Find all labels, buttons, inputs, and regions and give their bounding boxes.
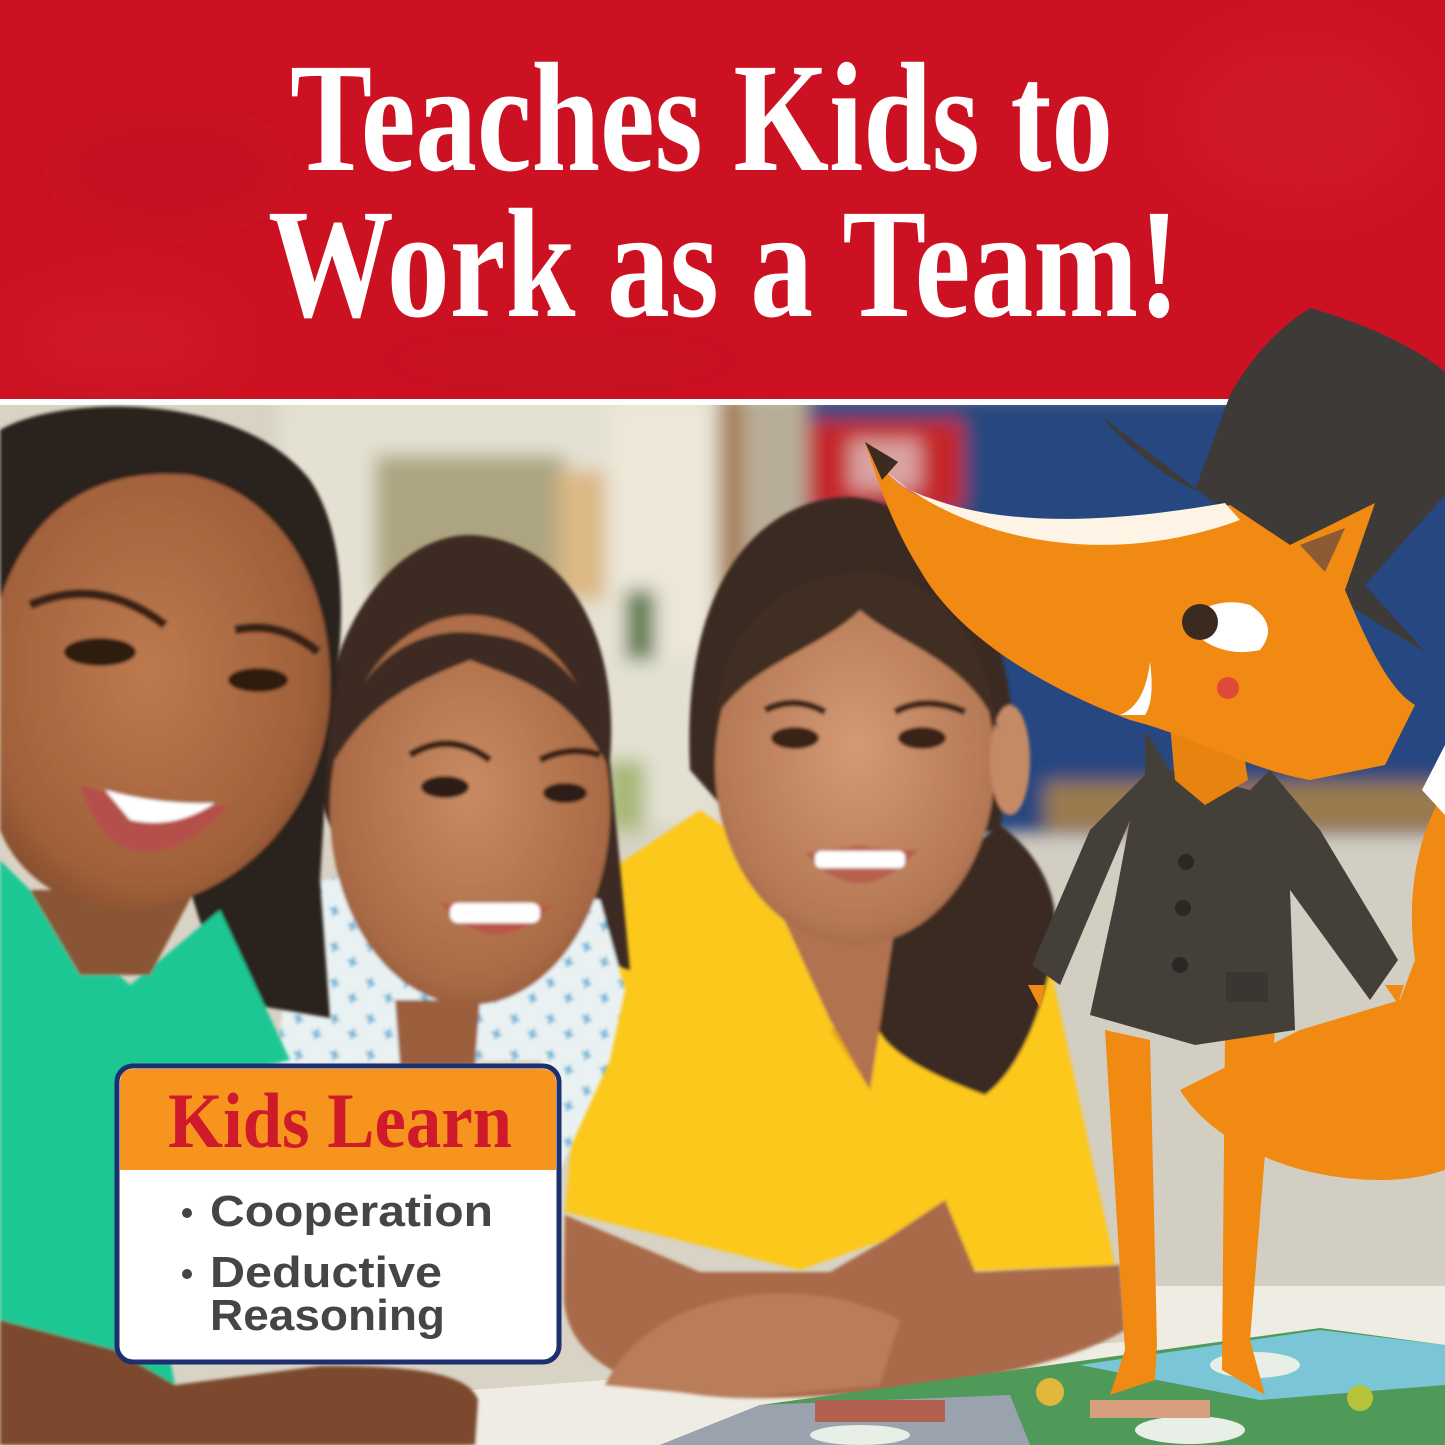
fox hands xyxy=(1028,985,1404,1008)
callout: kids learn card xyxy=(117,1066,559,1362)
fox head xyxy=(865,442,1415,780)
title: Teaches Kids to xyxy=(290,31,1113,204)
fox character xyxy=(865,308,1445,1395)
fox eye xyxy=(1182,602,1268,652)
card header xyxy=(120,1069,556,1170)
fox cheek xyxy=(1217,677,1239,699)
child: left girl in green shirt xyxy=(0,407,478,1445)
fox hat xyxy=(1100,308,1445,652)
table xyxy=(470,1286,1445,1445)
fox white stripe xyxy=(885,470,1240,545)
card list: Reasoning xyxy=(210,1291,445,1340)
fox tail xyxy=(1180,790,1445,1180)
card list: Deductive xyxy=(210,1248,442,1297)
child: middle girl with blue print shirt xyxy=(280,535,630,1170)
fox inner ear xyxy=(1300,528,1345,572)
fox tooth xyxy=(1120,662,1152,715)
title: Work as a Team! xyxy=(268,177,1180,350)
fox legs xyxy=(1105,1030,1275,1395)
fox pocket xyxy=(1226,972,1268,1002)
fox tail tip xyxy=(1422,745,1445,815)
fox jacket xyxy=(1032,730,1398,1045)
fox ear tip xyxy=(865,442,898,480)
panel: red title banner xyxy=(0,0,1445,399)
fox neck xyxy=(1170,725,1248,805)
card list xyxy=(182,1187,493,1340)
panel: classroom photo xyxy=(0,395,1445,1445)
fox buttons xyxy=(1172,854,1194,973)
game board xyxy=(660,1328,1445,1445)
title xyxy=(268,31,1180,350)
card list: Cooperation xyxy=(210,1187,493,1236)
child: right girl in yellow shirt xyxy=(564,497,1125,1398)
card heading: Kids Learn xyxy=(168,1077,512,1164)
